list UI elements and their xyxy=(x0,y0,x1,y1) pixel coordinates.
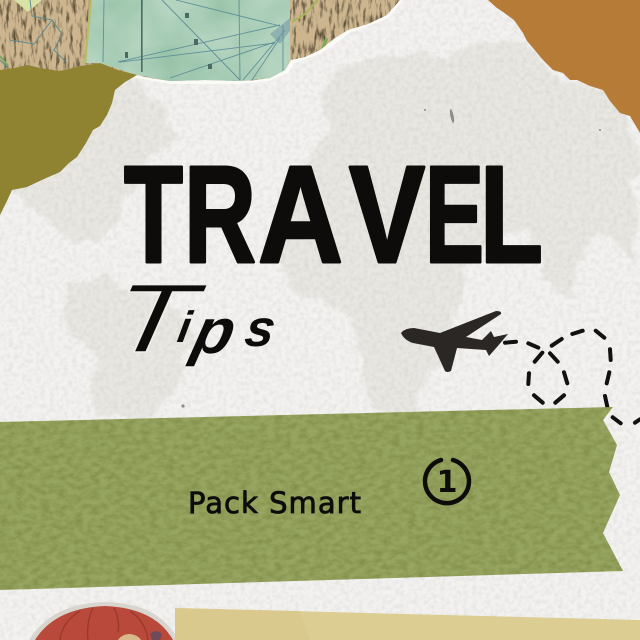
title: TRAVEL: L xyxy=(480,138,543,292)
tape label: Pack Smart xyxy=(188,486,361,520)
tape body xyxy=(0,407,623,590)
balloon: highlight xyxy=(118,634,141,640)
subtitle: Tips xyxy=(102,264,280,373)
map: torn paper edge xyxy=(0,0,403,84)
hot air balloon xyxy=(29,602,178,640)
title: TRAVEL: E xyxy=(425,138,484,292)
torn vintage map xyxy=(0,0,402,84)
title: TRAVEL xyxy=(124,138,543,292)
subtitle: Tips: T xyxy=(102,264,213,373)
map: sea sheet xyxy=(84,0,290,81)
subtitle: Tips: i xyxy=(174,303,197,352)
number badge xyxy=(425,460,469,503)
tape texture xyxy=(0,400,640,595)
balloon: gores xyxy=(60,608,148,640)
orange torn paper corner xyxy=(488,0,640,133)
icon: airplane xyxy=(401,311,508,372)
subtitle: Tips: p xyxy=(185,295,244,367)
olive torn paper corner xyxy=(0,63,137,215)
map: port cluster xyxy=(270,18,292,44)
dashed flight path xyxy=(505,331,640,423)
balloon: shadow xyxy=(150,631,162,640)
paper specks xyxy=(181,109,601,621)
subtitle: Tips: s xyxy=(241,300,280,358)
title: TRAVEL: R xyxy=(184,138,256,292)
balloon: envelope xyxy=(35,606,173,640)
title: TRAVEL: V xyxy=(349,138,425,292)
faded world map xyxy=(4,40,636,418)
title: TRAVEL: T xyxy=(124,138,183,292)
title: TRAVEL: A xyxy=(258,138,343,292)
khaki paper panel xyxy=(175,608,640,640)
number badge: 1 xyxy=(437,465,457,500)
map: land sheet xyxy=(0,0,400,81)
green washi tape panel xyxy=(0,400,640,595)
balloon: paper outline xyxy=(29,602,178,640)
